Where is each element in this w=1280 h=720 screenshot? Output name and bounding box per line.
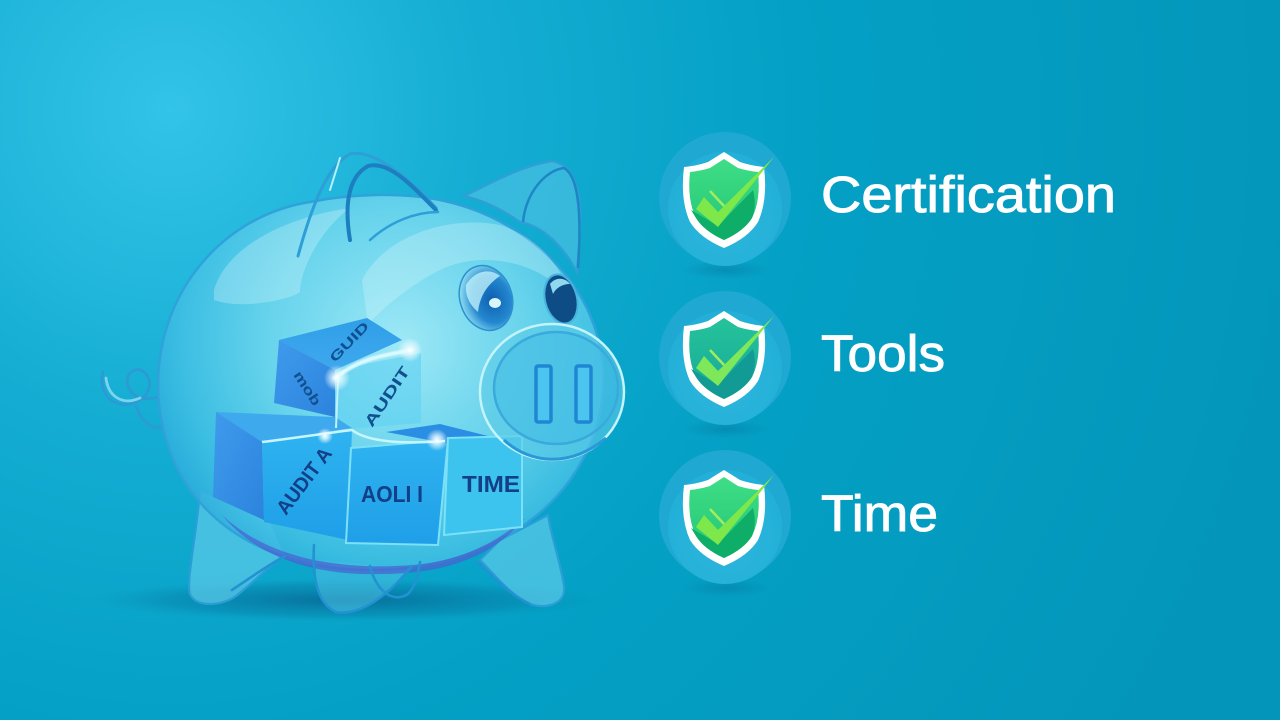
pig body [158, 195, 603, 570]
piggy bank illustration [102, 153, 624, 613]
icon: middle leg fill [316, 560, 410, 613]
cube: middle: AOLI I [361, 481, 423, 507]
icon: left eye [451, 259, 521, 337]
icon: snout [480, 324, 624, 460]
cube: left [213, 412, 352, 540]
icon: time shield [659, 450, 791, 584]
icon: right ear inner line [523, 168, 579, 268]
cube: top: GUID [326, 319, 372, 365]
base rim [222, 515, 525, 574]
body highlights [214, 208, 572, 325]
label: Tools: Tools [821, 325, 945, 382]
icon: right eye [539, 271, 583, 327]
icon: front leg [480, 515, 564, 606]
cube: top: mob [290, 368, 325, 409]
cube: middle [346, 440, 448, 545]
checklist item: Tools [659, 291, 945, 438]
cube: top: AUDIT [361, 364, 414, 430]
icon: left ear [298, 153, 438, 256]
icon: tools shield [659, 291, 791, 425]
checklist item: Time [659, 450, 938, 597]
cube: time: TIME [462, 471, 520, 497]
icon: rear leg [189, 490, 285, 604]
cube: time [386, 424, 522, 535]
icon: middle legs [232, 545, 530, 613]
icon: certification shield [659, 132, 791, 266]
cube: left: AUDIT A [272, 443, 337, 519]
icon: right ear [464, 161, 580, 272]
floor shadow [90, 578, 600, 622]
label: Certification: Certification [821, 166, 1116, 223]
cube: top [274, 318, 421, 430]
checklist item: Certification [659, 132, 1116, 279]
icon: curly tail [102, 370, 166, 428]
sparkles [262, 338, 448, 451]
label: Time: Time [821, 485, 938, 542]
